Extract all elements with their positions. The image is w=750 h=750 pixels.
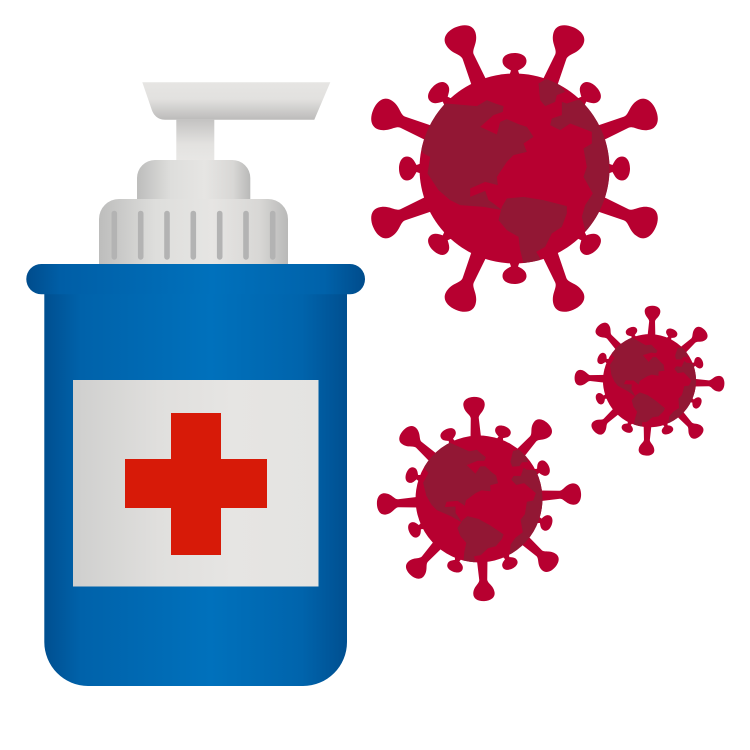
pump collar <box>137 160 250 200</box>
pump head <box>142 82 330 120</box>
icon: red cross <box>125 413 267 555</box>
large virus <box>367 21 662 316</box>
ribbed cap <box>99 199 288 265</box>
sanitizer bottle <box>26 82 365 686</box>
bottle body <box>44 285 347 686</box>
medium virus <box>353 373 605 625</box>
pump stem <box>176 120 214 161</box>
bottle rim <box>26 264 365 294</box>
small virus <box>553 285 746 477</box>
bottle label <box>73 380 318 586</box>
